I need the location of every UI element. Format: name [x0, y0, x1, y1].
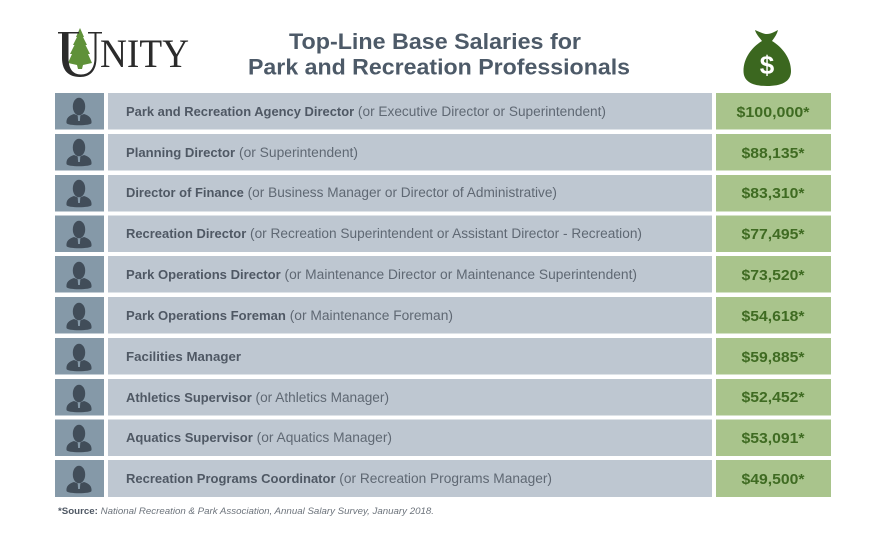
row: Facilities Manager: Facilities Manager: [126, 349, 241, 364]
row: Recreation Programs Coordinator: $49,500*: [742, 472, 805, 488]
title: [248, 29, 630, 80]
title: Park and Recreation Professionals: [248, 54, 630, 80]
row: Athletics Supervisor: $52,452*: [742, 390, 805, 406]
icon: money bag: [744, 30, 791, 86]
row: Park and Recreation Agency Director: Park and Recreation Agency Director (or Executive Director or Superintendent): [126, 104, 606, 119]
source note: *Source: National Recreation & Park Association, Annual Salary Survey, January 2018.: [58, 506, 434, 517]
row: Park Operations Director: [55, 256, 831, 292]
logo letter U: [58, 32, 102, 77]
row: Recreation Director: $77,495*: [742, 227, 805, 243]
row: Facilities Manager: [55, 338, 831, 374]
row: Park and Recreation Agency Director: [55, 93, 831, 130]
row: Park Operations Director: Park Operations Director (or Maintenance Director or Maintenance Superintendent): [126, 267, 637, 282]
row: Aquatics Supervisor: $53,091*: [742, 431, 805, 447]
row: Aquatics Supervisor: [55, 420, 831, 456]
row: Park Operations Foreman: [55, 297, 831, 334]
row: Athletics Supervisor: Athletics Supervisor (or Athletics Manager): [126, 390, 389, 405]
row: Recreation Director: Recreation Director (or Recreation Superintendent or Assistant Director - Recreation): [126, 226, 642, 241]
row: Facilities Manager: $59,885*: [742, 350, 805, 366]
row: Park Operations Foreman: Park Operations Foreman (or Maintenance Foreman): [126, 308, 453, 323]
row: Park Operations Foreman: $54,618*: [742, 309, 805, 325]
row: Park Operations Director: $73,520*: [742, 268, 805, 284]
logo wordmark: NITY: [100, 31, 189, 76]
row: Director of Finance: $83,310*: [742, 186, 805, 202]
row: Recreation Programs Coordinator: [55, 460, 831, 497]
row: Planning Director: $88,135*: [742, 146, 805, 162]
icon: money bag: $: [760, 50, 775, 80]
row: Park and Recreation Agency Director: $100,000*: [736, 105, 810, 121]
title: Top-Line Base Salaries for: [289, 29, 581, 54]
row: Director of Finance: [55, 175, 831, 212]
icon: pine tree: [68, 28, 92, 69]
row: Planning Director: Planning Director (or Superintendent): [126, 145, 358, 160]
row: Recreation Programs Coordinator: Recreation Programs Coordinator (or Recreation Programs Manager): [126, 471, 552, 486]
row: Director of Finance: Director of Finance (or Business Manager or Director of Administrative): [126, 185, 557, 200]
row: Planning Director: [55, 134, 831, 170]
row: Aquatics Supervisor: Aquatics Supervisor (or Aquatics Manager): [126, 430, 392, 445]
logo: Unity: [58, 28, 189, 77]
row: Recreation Director: [55, 216, 831, 252]
row: Athletics Supervisor: [55, 379, 831, 416]
